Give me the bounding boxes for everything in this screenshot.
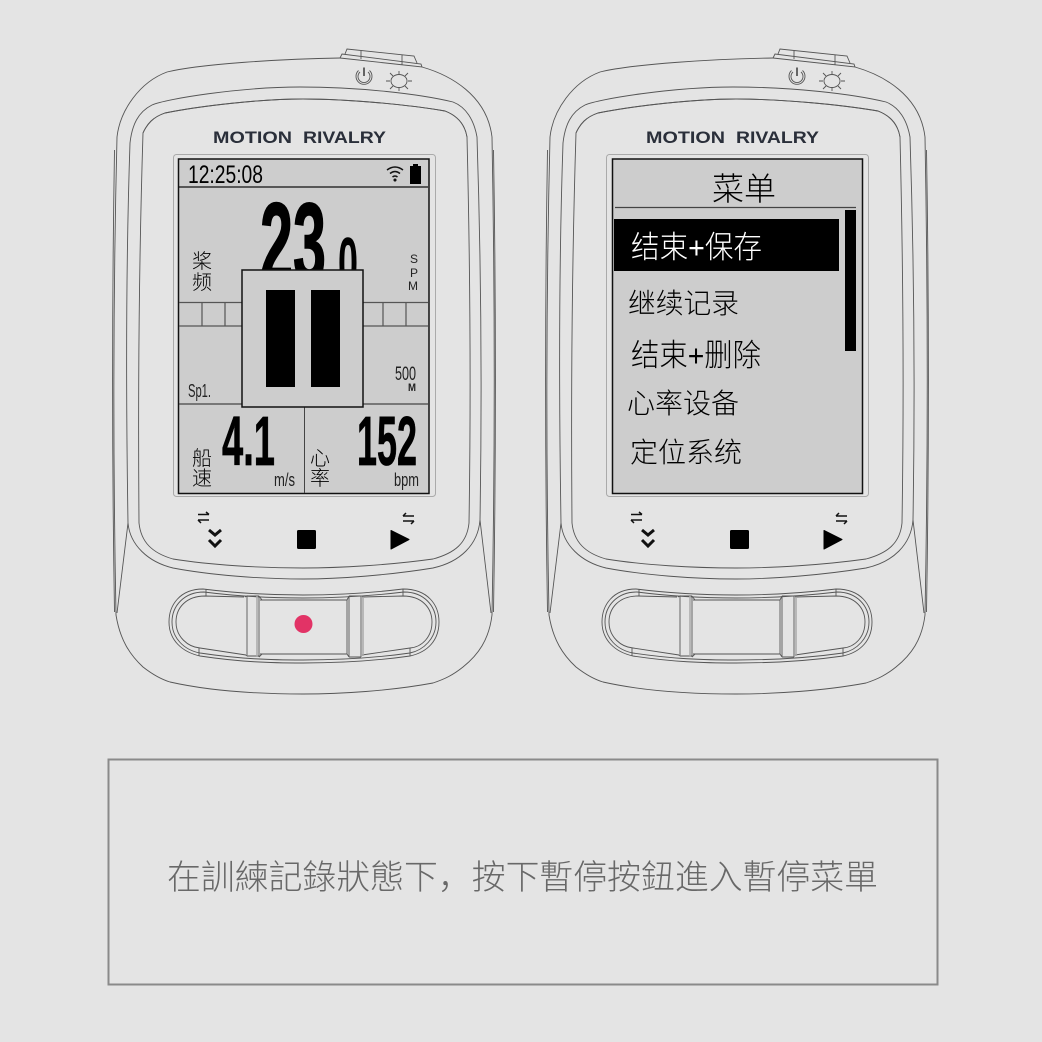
SPM unit: P [410, 266, 418, 280]
menu item: end and delete: 结束+删除 [631, 338, 761, 373]
screen: menu [612, 159, 862, 494]
icon: wifi [387, 167, 403, 181]
speed unit: m/s [274, 470, 295, 490]
clock: 12:25:08 [188, 161, 263, 189]
menu item: resume: 继续记录 [628, 288, 739, 319]
heart rate label second char: 率 [310, 467, 330, 490]
caption panel [108, 760, 938, 984]
selected menu row [614, 219, 839, 271]
red record indicator [294, 615, 312, 633]
heart rate label: 心 [310, 448, 330, 470]
screen: data page [178, 159, 429, 494]
scroll bar [845, 210, 856, 351]
heart rate value: 152 [357, 402, 417, 480]
big stroke rate value: 23 [260, 180, 326, 305]
menu item: end and save: 结束+保存 [631, 230, 762, 265]
pause overlay [242, 270, 363, 407]
split bar [179, 302, 428, 326]
menu item: heart rate device: 心率设备 [627, 388, 739, 419]
device outline with buttons and logo [113, 49, 495, 694]
cadence label: 桨 [192, 250, 212, 273]
metre unit: M [408, 382, 416, 394]
icon: battery [410, 164, 421, 184]
device: right, pause menu [546, 49, 928, 694]
device: left, recording paused [113, 49, 495, 694]
boat speed label: 船 [192, 447, 212, 470]
caption text: 在訓練記錄狀態下，按下暫停按鈕進入暫停菜單 [167, 850, 878, 899]
SPM unit: S [410, 252, 418, 266]
500 m label: 500 [395, 364, 416, 385]
menu item: positioning system: 定位系统 [630, 437, 742, 468]
heart rate unit: bpm [394, 470, 419, 490]
SPM unit: M [408, 279, 418, 293]
split label: Sp1. [188, 381, 211, 401]
cadence label second char: 频 [192, 271, 212, 294]
boat speed value: 4.1 [222, 402, 275, 480]
screen: data page: 0 [338, 224, 358, 304]
menu title: 菜单 [712, 171, 776, 207]
device outline with buttons and logo [546, 49, 928, 694]
SPM unit [408, 252, 418, 293]
boat speed label second char: 速 [192, 467, 212, 490]
